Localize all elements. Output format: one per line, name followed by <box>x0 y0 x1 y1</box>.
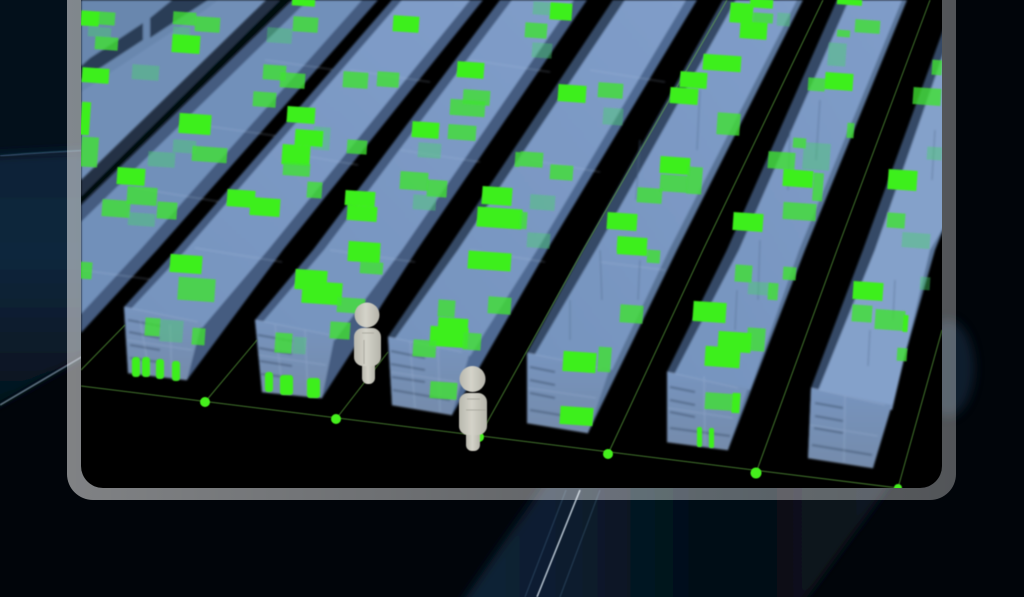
rack: R2 <box>255 0 587 398</box>
sensor nodes on the floor <box>200 397 902 492</box>
rack: R3 <box>388 0 697 415</box>
figure: person right <box>459 366 487 451</box>
figure: person left <box>354 302 381 384</box>
rack: R0 <box>81 0 378 333</box>
gap: thin black aisle top-left <box>81 0 290 204</box>
rack: R4 <box>527 0 803 433</box>
rack: top-left corner rack <box>81 0 280 197</box>
rack: R6 <box>808 25 945 468</box>
rack: R1 <box>124 0 483 380</box>
rack: R5 <box>667 0 907 450</box>
guide lines on the floor <box>81 0 942 488</box>
background fan of light at the bottom <box>450 480 893 597</box>
rounded device frame <box>67 0 956 500</box>
background glow at the right <box>922 320 974 416</box>
viewport: warehouse 3D scene <box>79 0 945 492</box>
highlighted green inventory blocks <box>79 0 943 448</box>
background swoosh: left blue wave <box>0 150 95 416</box>
